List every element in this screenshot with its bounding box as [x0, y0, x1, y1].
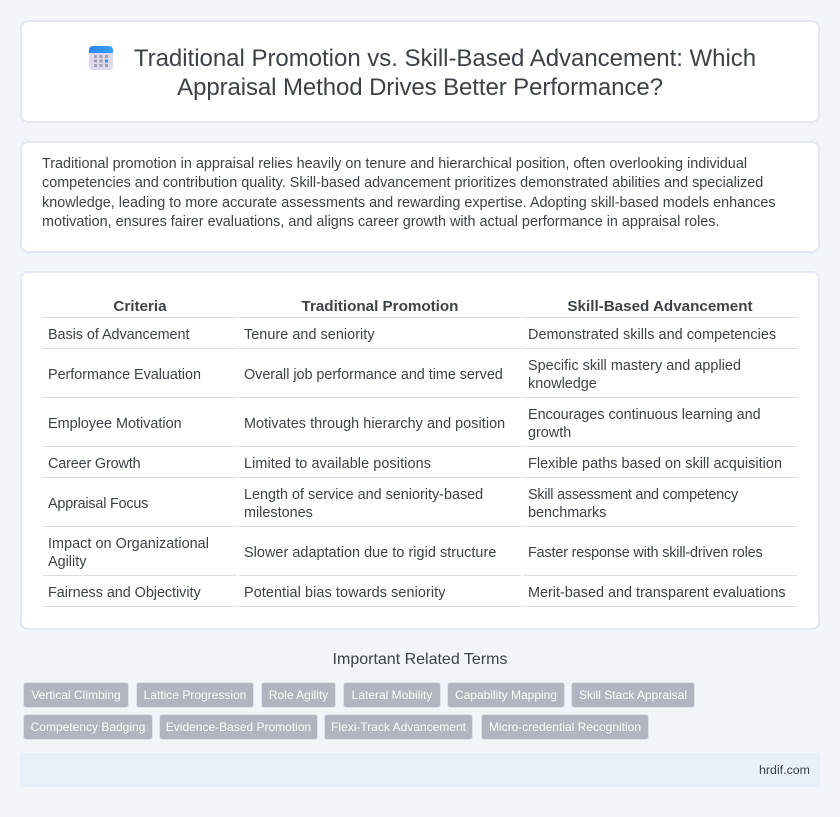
text block: description: competencies and contribution quality. Skill-based advancement prioritizes demonstrated abilities and specialized [42, 175, 763, 191]
row: appraisal focus [48, 487, 738, 521]
row: career growth: Career Growth [48, 456, 140, 472]
row: employee motivation [48, 407, 761, 441]
panel: header [20, 20, 820, 123]
row: fairness and objectivity [48, 585, 786, 601]
row: basis of advancement: Basis of Advancement [48, 327, 189, 343]
row: employee motivation: Motivates through hierarchy and position [244, 416, 505, 432]
row: basis of advancement [48, 327, 776, 343]
row: performance evaluation: Specific skill mastery and applied [528, 358, 741, 374]
related terms tags: Competency Badging [31, 720, 145, 734]
row: appraisal focus: Length of service and seniority-based [244, 487, 483, 503]
table header row: Criteria [113, 298, 167, 315]
row: appraisal focus: Skill assessment and competency [528, 487, 738, 503]
row: performance evaluation: Overall job performance and time served [244, 367, 503, 383]
row: impact on organizational agility: Agility [48, 554, 86, 570]
row: career growth [48, 456, 782, 472]
related terms tags: Lattice Progression [144, 688, 246, 702]
footer source text: hrdif.com [759, 763, 810, 777]
icon: calendar [89, 46, 113, 70]
row: fairness and objectivity: Merit-based and transparent evaluations [528, 585, 786, 601]
row: employee motivation: Encourages continuous learning and [528, 407, 761, 423]
row: basis of advancement: Tenure and seniority [244, 327, 375, 343]
row: employee motivation: Employee Motivation [48, 416, 182, 432]
row: employee motivation: growth [528, 425, 571, 441]
heading: important related terms: Important Related Terms [333, 651, 507, 668]
panel: description [20, 141, 820, 253]
row: performance evaluation: knowledge [528, 376, 597, 392]
related terms tags: Vertical Climbing [31, 688, 121, 702]
related terms tags: Micro-credential Recognition [489, 720, 641, 734]
row: career growth: Flexible paths based on skill acquisition [528, 456, 782, 472]
row: impact on organizational agility: Slower adaptation due to rigid structure [244, 545, 496, 561]
related terms tags [23, 682, 695, 740]
table header row: Skill-Based Advancement [567, 298, 753, 315]
title [134, 45, 756, 101]
row: career growth: Limited to available positions [244, 456, 431, 472]
row: fairness and objectivity: Fairness and Objectivity [48, 585, 201, 601]
row: appraisal focus: Appraisal Focus [48, 496, 148, 512]
text block: description [42, 156, 776, 230]
panel: comparison table [20, 271, 820, 630]
related terms tags: Skill Stack Appraisal [579, 688, 687, 702]
related terms tags: Lateral Mobility [352, 688, 432, 702]
row: basis of advancement: Demonstrated skills and competencies [528, 327, 776, 343]
related terms tags: Capability Mapping [455, 688, 557, 702]
row: performance evaluation [48, 358, 741, 392]
row: impact on organizational agility: Faster response with skill-driven roles [528, 545, 762, 561]
text block: description: Traditional promotion in appraisal relies heavily on tenure and hierarchical position, often overlooking individual [42, 156, 747, 172]
row: appraisal focus: benchmarks [528, 505, 606, 521]
title: Traditional Promotion vs. Skill-Based Advancement: Which [134, 45, 756, 72]
table header row: Traditional Promotion [302, 298, 458, 315]
row: appraisal focus: milestones [244, 505, 313, 521]
related terms tags: Flexi-Track Advancement [331, 720, 466, 734]
text block: description: knowledge, leading to more accurate assessments and rewarding expertise. Adopting skill-based models enhances [42, 195, 776, 211]
footer bar [20, 753, 820, 787]
row: performance evaluation: Performance Evaluation [48, 367, 201, 383]
related terms tags: Role Agility [269, 688, 328, 702]
title: Appraisal Method Drives Better Performance? [177, 74, 663, 101]
table header row [113, 298, 753, 315]
related terms tags: Evidence-Based Promotion [166, 720, 311, 734]
row: impact on organizational agility [48, 536, 762, 570]
text block: description: motivation, ensures fairer evaluations, and aligns career growth with actual performance in appraisal roles. [42, 214, 720, 230]
row: fairness and objectivity: Potential bias towards seniority [244, 585, 446, 601]
row: impact on organizational agility: Impact on Organizational [48, 536, 209, 552]
